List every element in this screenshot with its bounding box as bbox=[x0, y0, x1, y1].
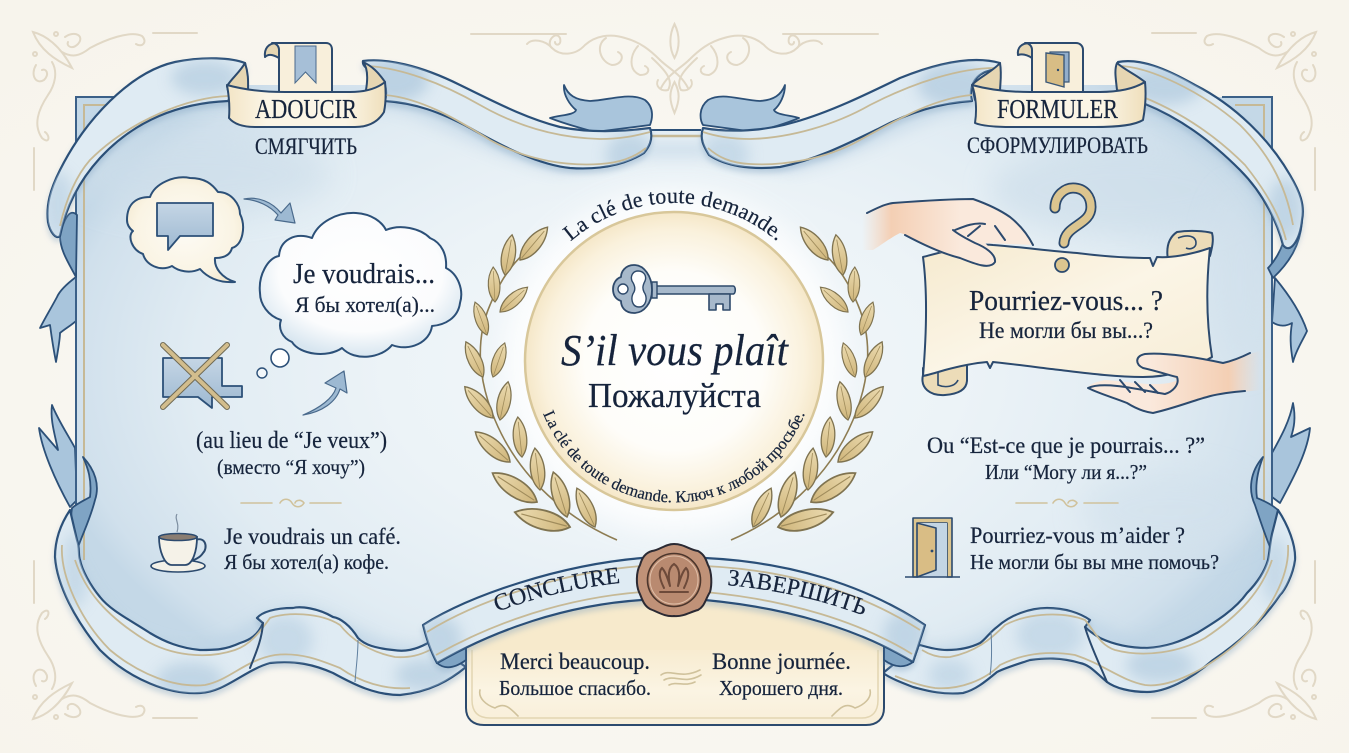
text: Est-ce que je pourrais: Ou “Est-ce que je pourrais... ?” bbox=[927, 433, 1205, 459]
scroll: Pourriez-vous: Pourriez-vous... ? bbox=[969, 285, 1163, 317]
ribbon: top centre left bbox=[361, 58, 654, 177]
icon: door on banner bbox=[1018, 43, 1083, 94]
text: au lieu de Je veux bbox=[196, 428, 387, 479]
label: ADOUCIR: ADOUCIR bbox=[255, 94, 357, 124]
icon: hand top left bbox=[862, 199, 1033, 267]
heading: СМЯГЧИТЬ: СМЯГЧИТЬ bbox=[255, 134, 357, 159]
icon: hand bottom right bbox=[1088, 350, 1262, 413]
ribbon label: CONCLURE: CONCLURE bbox=[494, 567, 620, 610]
ribbon: conclude arch bbox=[418, 558, 927, 667]
text: au lieu de Je veux: (au lieu de “Je veux”) bbox=[196, 428, 387, 454]
icon: bookmark bbox=[265, 43, 332, 94]
icon: wax seal bbox=[637, 544, 711, 616]
cloud: Je voudrais bbox=[260, 213, 461, 357]
icon: question mark bbox=[1055, 188, 1091, 243]
heading: СФОРМУЛИРОВАТЬ: СФОРМУЛИРОВАТЬ bbox=[967, 133, 1148, 158]
text: Je voudrais un café: Я бы хотел(а) кофе. bbox=[224, 550, 389, 574]
text: Pourriez-vous m'aider: Не могли бы вы мне помочь? bbox=[970, 550, 1219, 574]
text: Est-ce que je pourrais bbox=[927, 433, 1205, 484]
ribbon: bottom right bbox=[883, 510, 1295, 693]
curved motto: top: La clé de toute demande. bbox=[562, 190, 778, 242]
text: Pourriez-vous m'aider bbox=[970, 523, 1219, 574]
title: S'il vous plaît: S’il vous plaît bbox=[561, 326, 790, 375]
cloud: Je voudrais: Я бы хотел(а)... bbox=[295, 292, 435, 317]
frame lines bbox=[76, 97, 1272, 560]
icon: open door bbox=[905, 518, 960, 577]
medallion halo bbox=[504, 191, 844, 531]
text: au lieu de Je veux: (вместо “Я хочу”) bbox=[217, 455, 365, 479]
ribbon swallow tails behind the panel bbox=[39, 277, 1310, 507]
text: Est-ce que je pourrais: Или “Могу ли я...?” bbox=[985, 460, 1147, 484]
icon: small speech cloud with chat bubble bbox=[127, 177, 243, 282]
icon: coffee cup bbox=[151, 514, 206, 572]
title translation: Пожалуйста: Пожалуйста bbox=[588, 376, 761, 415]
laurel wreath right bbox=[731, 223, 888, 540]
scroll: Pourriez-vous: Не могли бы вы...? bbox=[979, 318, 1153, 343]
curved motto: bottom: La clé de toute demande. Ключ к любой просьбе. bbox=[543, 410, 805, 503]
panel: conclusion card: Большое спасибо. bbox=[499, 676, 651, 700]
label: FORMULER: FORMULER bbox=[997, 94, 1118, 124]
ribbon label: ЗАВЕРШИТЬ: ЗАВЕРШИТЬ bbox=[728, 570, 865, 614]
divider right bbox=[1016, 499, 1118, 507]
ribbon: top right bbox=[1118, 61, 1303, 248]
panel: conclusion card: Merci beaucoup. bbox=[500, 649, 650, 674]
text: Je voudrais un café: Je voudrais un café. bbox=[224, 524, 401, 549]
icon: crossed-out speech bubble bbox=[163, 345, 242, 408]
panel: watercolor background bbox=[60, 83, 1275, 668]
cloud: Je voudrais: Je voudrais... bbox=[293, 258, 435, 290]
ribbon: top centre right bbox=[701, 60, 1000, 177]
question mark dot bbox=[1055, 258, 1069, 272]
banner: FORMULER bbox=[972, 43, 1146, 127]
icon: key bbox=[613, 265, 735, 313]
ribbon: bottom left bbox=[55, 510, 466, 698]
scroll: Pourriez-vous bbox=[922, 231, 1213, 395]
arrow: to soft request cloud bbox=[244, 198, 295, 223]
panel: conclusion card: Хорошего дня. bbox=[719, 676, 843, 700]
ribbon folds bbox=[60, 85, 1302, 550]
arrow: up to soft request cloud bbox=[303, 371, 347, 415]
text: Pourriez-vous m'aider: Pourriez-vous m’aider ? bbox=[970, 523, 1185, 548]
panel: conclusion card bbox=[466, 595, 884, 725]
thought bubbles bbox=[257, 349, 289, 378]
medallion disc bbox=[525, 212, 823, 510]
panel: conclusion card: Bonne journée. bbox=[712, 649, 851, 674]
text: Je voudrais un café bbox=[224, 524, 401, 574]
banner: ADOUCIR bbox=[227, 43, 386, 127]
ribbon: top left bbox=[42, 58, 246, 239]
laurel wreath left bbox=[460, 223, 617, 540]
top centre ornament bbox=[471, 24, 878, 113]
divider left bbox=[241, 499, 341, 507]
